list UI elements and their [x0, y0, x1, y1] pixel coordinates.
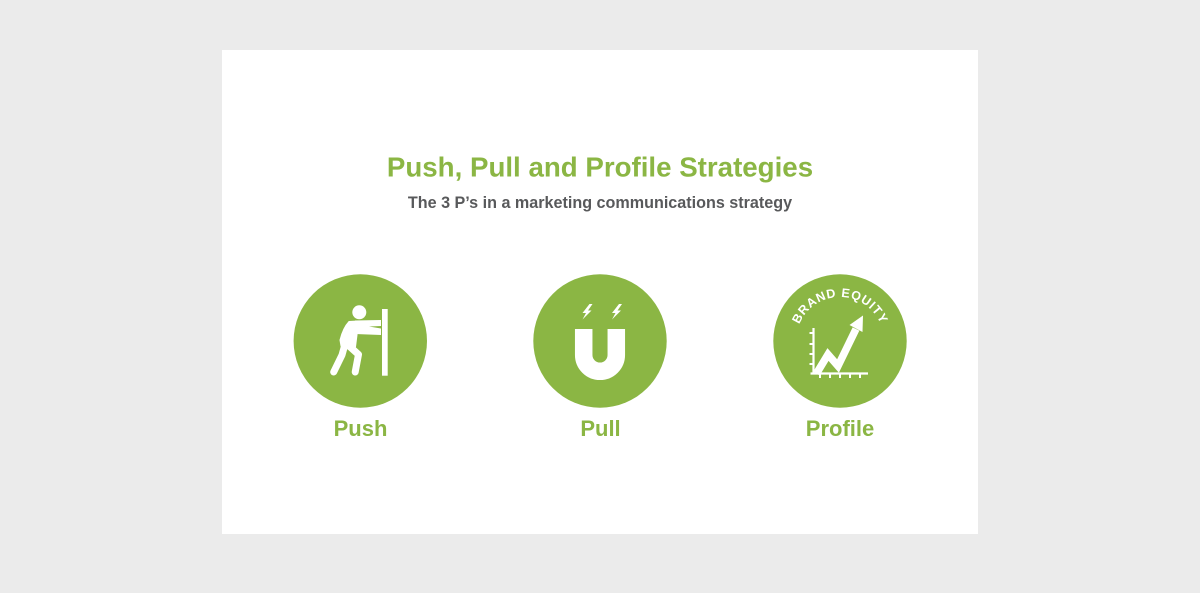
- label: profile: Profile: [806, 416, 874, 441]
- subtitle: The 3 P’s in a marketing communications strategy: [408, 194, 792, 212]
- label: push: Push: [334, 416, 387, 441]
- icon: profile brand equity chart: [773, 274, 907, 408]
- panel: white card: [222, 50, 978, 534]
- icon: profile brand equity chart: BRAND EQUITY: [792, 288, 888, 324]
- title: Push, Pull and Profile Strategies: [387, 152, 813, 182]
- label: pull: Pull: [580, 416, 621, 441]
- icon: pull magnet: [533, 274, 667, 408]
- icon: push: [294, 274, 427, 408]
